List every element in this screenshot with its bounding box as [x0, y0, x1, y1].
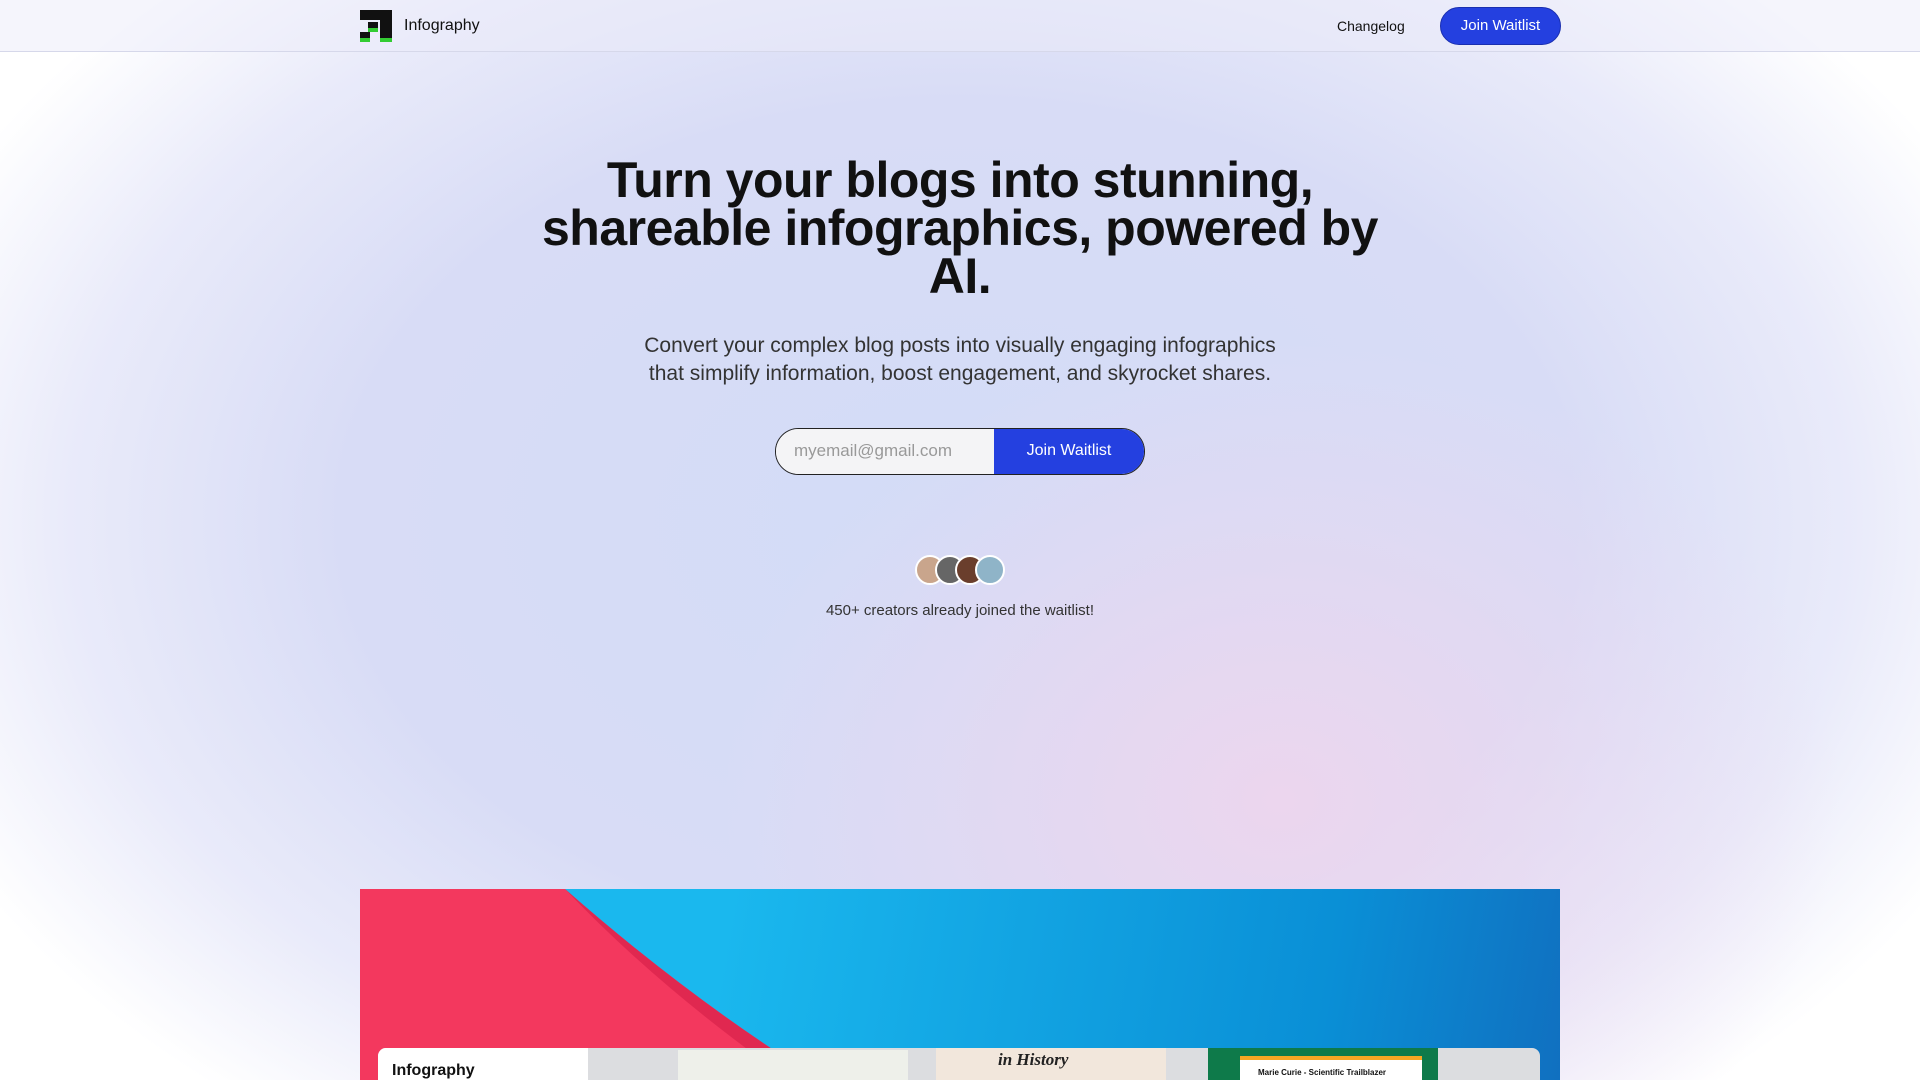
- email form: [775, 428, 1145, 475]
- header button: Join Waitlist: [1461, 17, 1540, 34]
- header bar: [0, 0, 1920, 52]
- submit button: Join Waitlist: [1027, 442, 1111, 459]
- logo icon: [360, 10, 392, 42]
- email input: myemail@gmail.com: [794, 441, 952, 460]
- title: [542, 152, 1378, 304]
- nav link changelog: Changelog: [1337, 18, 1405, 34]
- header button: [1440, 7, 1561, 45]
- app window card: [378, 1048, 1540, 1080]
- avatars: [915, 555, 1005, 585]
- email input: [776, 429, 994, 474]
- subtitle: Convert your complex blog posts into visually engaging infographics: [644, 334, 1276, 357]
- title: Turn your blogs into stunning,: [607, 152, 1313, 208]
- app window card: in History: [998, 1050, 1068, 1069]
- brand name: Infography: [404, 17, 480, 34]
- product screenshot panel: [360, 889, 1560, 1080]
- title: shareable infographics, powered by: [542, 200, 1378, 256]
- app window card: Marie Curie - Scientific Trailblazer: [1258, 1068, 1386, 1077]
- app window card: Infography: [392, 1062, 475, 1079]
- subtitle: [644, 334, 1276, 385]
- social proof text: 450+ creators already joined the waitlist!: [826, 602, 1094, 619]
- submit button: [994, 429, 1144, 474]
- subtitle: that simplify information, boost engagement, and skyrocket shares.: [649, 362, 1271, 385]
- title: AI.: [929, 248, 991, 304]
